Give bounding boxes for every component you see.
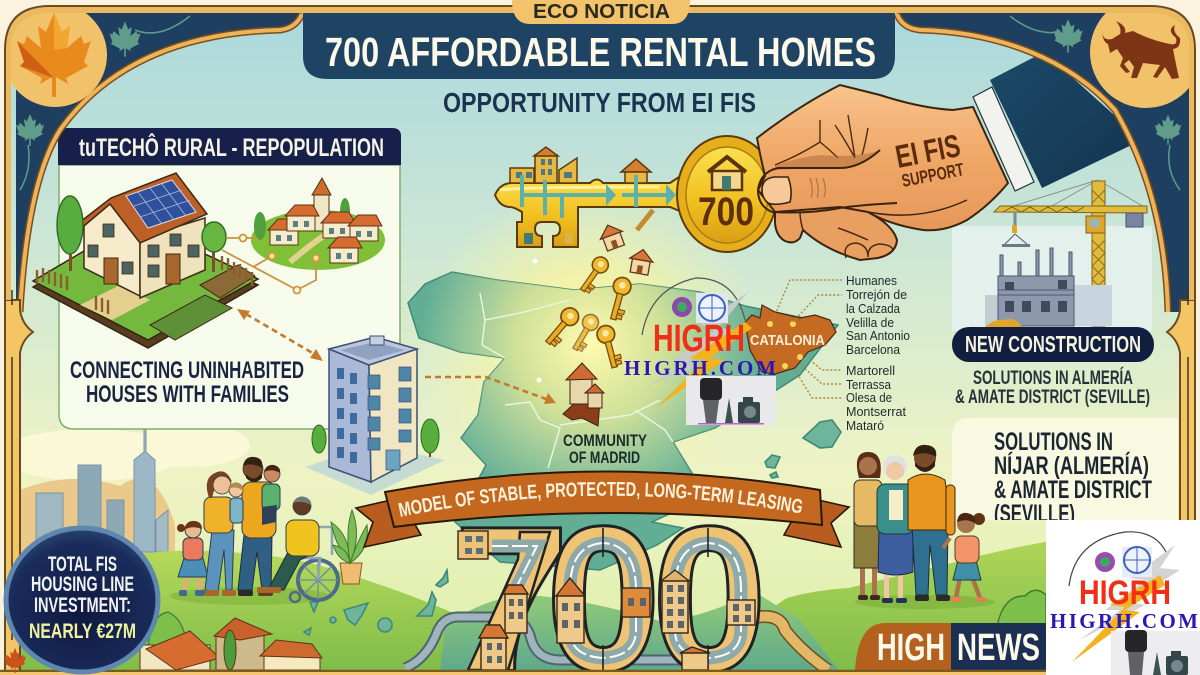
- map of Spain: [408, 272, 838, 570]
- arrow: panel to building: [237, 309, 323, 361]
- panel: solutions in Níjar: SOLUTIONS IN: [994, 428, 1113, 456]
- illustration: village: [251, 178, 385, 270]
- man: [908, 445, 955, 601]
- hand label: [892, 127, 966, 191]
- panel: tuTECHO rural repopulation: [33, 128, 401, 429]
- panel: solutions in Níjar: [952, 418, 1178, 528]
- eco noticia tab: ECO NOTICIA: [533, 1, 670, 23]
- icon: maple leaf: [17, 13, 91, 97]
- big number 700: [405, 520, 828, 673]
- finger creases: [775, 115, 868, 165]
- girl: [943, 513, 986, 602]
- panel heading: tuTECHÔ RURAL - REPOPULATION: [79, 132, 384, 162]
- city list with leaders: Humanes: [846, 273, 897, 288]
- city list with leaders: la Calzada: [846, 301, 901, 316]
- family left: [170, 457, 367, 605]
- baby: [229, 483, 243, 523]
- family right: [854, 445, 995, 609]
- digits 700: [460, 524, 761, 670]
- title banner: [303, 13, 895, 79]
- roads inside digits: [492, 543, 741, 658]
- Madrid label: COMMUNITY: [563, 431, 648, 450]
- connector lines: [222, 234, 320, 294]
- city list with leaders: Barcelona: [846, 342, 901, 357]
- total investment circle: HOUSING LINE: [31, 573, 134, 596]
- Madrid label: OF MADRID: [569, 448, 640, 467]
- key city top: [510, 147, 651, 183]
- Madrid marker: [563, 363, 648, 467]
- city list with leaders: Martorell: [846, 363, 895, 378]
- skyline: [36, 427, 168, 563]
- panel caption: [70, 357, 304, 408]
- bottom village houses: [140, 618, 322, 670]
- thumb: [758, 150, 897, 212]
- watermark logo: bottom right: HIGRH: [1079, 574, 1171, 612]
- crane: [994, 180, 1147, 326]
- potted plant: [331, 510, 367, 584]
- left side strip with notch: [5, 300, 33, 671]
- lower fingers: [775, 200, 897, 260]
- diagonal of seven: [468, 532, 550, 670]
- falling keys and small houses: [532, 221, 655, 382]
- city list with leaders: Terrassa: [846, 377, 892, 392]
- panel caption: CONNECTING UNINHABITED: [70, 357, 304, 384]
- key: [495, 136, 777, 252]
- back of hand: [757, 85, 1008, 230]
- frame corners: [3, 0, 1200, 312]
- illustration: solar house on plot: [33, 173, 258, 348]
- total investment circle: TOTAL FIS: [48, 553, 117, 576]
- city list with leaders: Montserrat: [846, 404, 906, 419]
- islands: [304, 420, 841, 635]
- watermark logo: bottom right: [1046, 520, 1200, 675]
- panel body: [59, 165, 400, 429]
- icon: bull: [1102, 21, 1180, 79]
- key head: [677, 136, 777, 252]
- new construction text: [955, 367, 1150, 408]
- ribbon banner: MODEL OF STABLE, PROTECTED, LONG-TERM LEASING: [398, 482, 802, 517]
- girl: [177, 521, 208, 596]
- new construction text: SOLUTIONS IN ALMERÍA: [973, 367, 1133, 389]
- right side strip with notch: [1167, 300, 1195, 525]
- father: [238, 457, 276, 596]
- badge: High News: [855, 623, 1047, 670]
- man in wheelchair: [257, 497, 338, 602]
- corner top left: [3, 3, 302, 312]
- hand label: EI FIS: [892, 127, 963, 175]
- hand label: SUPPORT: [900, 159, 966, 191]
- title banner: 700 AFFORDABLE RENTAL HOMES: [325, 29, 876, 75]
- apartment building: [305, 336, 445, 495]
- panel heading: [58, 128, 401, 165]
- key head: 700: [698, 190, 754, 234]
- ribbon banner: [354, 470, 851, 548]
- buildings on digits: [458, 531, 755, 670]
- watermark logo: centre: HIGRH: [653, 318, 745, 360]
- sleeve and cuff: [973, 52, 1142, 191]
- subtitle: OPPORTUNITY FROM EI FIS: [443, 87, 756, 118]
- city list with leaders: Mataró: [846, 418, 884, 433]
- arrow: building to Madrid: [425, 377, 556, 404]
- new construction pill: [952, 327, 1154, 362]
- city list with leaders: Olesa de: [846, 390, 892, 405]
- key shaft and teeth: [495, 175, 682, 247]
- city list with leaders: San Antonio: [846, 328, 910, 343]
- grandmother: [877, 455, 914, 603]
- watermark logo: bottom right: HIGRH.COM: [1050, 609, 1198, 633]
- green ground: [5, 520, 1190, 672]
- Catalonia region: [745, 305, 836, 374]
- badge: High News: HIGH: [877, 627, 945, 669]
- panel caption: HOUSES WITH FAMILIES: [86, 381, 289, 408]
- total investment circle: NEARLY €27M: [29, 620, 136, 643]
- icon: small maple corner: [4, 648, 26, 673]
- total investment circle: [6, 528, 158, 672]
- hand holding key: [757, 85, 1008, 260]
- eco noticia tab: [512, 0, 690, 24]
- badge: High News: NEWS: [957, 627, 1040, 669]
- corner top right: [897, 0, 1200, 312]
- panel: solutions in Níjar: (SEVILLE): [994, 500, 1075, 528]
- total investment circle: INVESTMENT:: [34, 594, 131, 617]
- watermark logo: centre: HIGRH.COM: [624, 356, 776, 380]
- teal arrows on key: [522, 175, 668, 218]
- city list with leaders: [772, 273, 910, 433]
- mother: [204, 471, 236, 596]
- Catalonia region: CATALONIA: [750, 332, 825, 349]
- city list with leaders: Torrejón de: [846, 287, 907, 302]
- watermark logo: centre: [624, 278, 776, 425]
- woman: [854, 452, 882, 600]
- roads behind digits: [405, 616, 828, 670]
- city list with leaders: Velilla de: [846, 315, 894, 330]
- Madrid label: [563, 431, 648, 467]
- panel: new construction: [952, 180, 1154, 408]
- toddler: [262, 465, 280, 525]
- building under construction: [985, 248, 1112, 327]
